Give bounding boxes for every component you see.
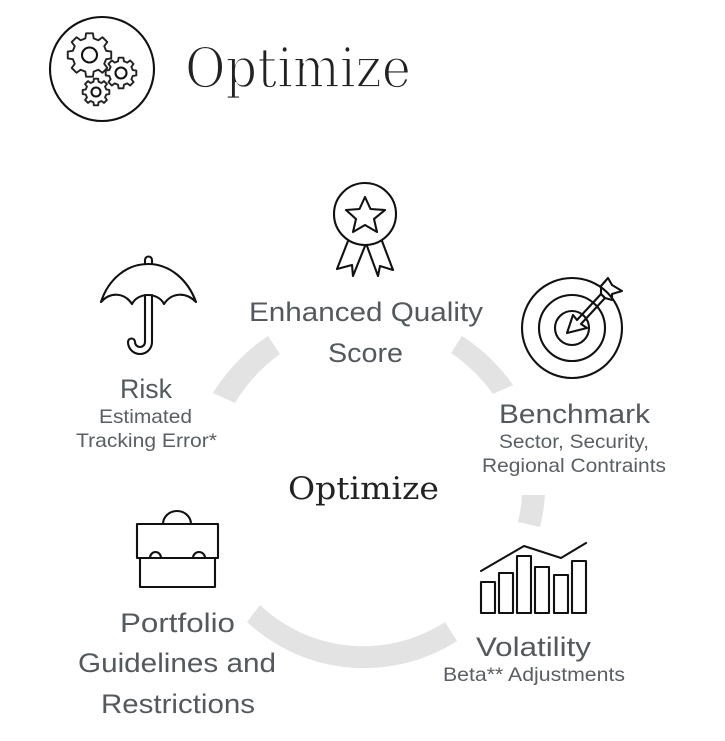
icon: target with arrow xyxy=(522,278,622,378)
icon: umbrella xyxy=(101,257,196,354)
label: Portfolio Guidelines and Restrictions: Guidelines and xyxy=(78,648,276,678)
icon: volatility bar chart xyxy=(481,543,586,613)
ring segment: right xyxy=(518,495,545,527)
header icon: gears in circle xyxy=(50,17,154,121)
center heading: Optimize xyxy=(288,471,439,507)
label: Volatility: Volatility xyxy=(476,632,592,662)
label: Volatility: Beta** Adjustments xyxy=(443,664,625,686)
icon: briefcase xyxy=(137,511,218,587)
title: Optimize xyxy=(185,36,411,100)
label: Enhanced Quality Score: Enhanced Quality xyxy=(249,297,484,327)
label: Benchmark: Regional Contraints xyxy=(482,455,666,477)
label: Benchmark: Benchmark xyxy=(499,399,651,429)
label: Benchmark: Sector, Security, xyxy=(499,431,649,453)
ring segment: top right xyxy=(451,336,513,394)
label: Risk xyxy=(76,374,217,452)
label: Portfolio Guidelines and Restrictions: Restrictions xyxy=(101,689,255,719)
icon: award ribbon xyxy=(334,183,396,276)
label: Risk: Estimated xyxy=(99,406,192,428)
cycle ring xyxy=(213,336,545,668)
label: Risk: Risk xyxy=(120,374,172,404)
label: Risk: Tracking Error* xyxy=(76,430,217,452)
label: Enhanced Quality Score xyxy=(249,297,484,368)
label: Portfolio Guidelines and Restrictions: Portfolio xyxy=(120,608,235,638)
label: Benchmark xyxy=(482,399,666,477)
label: Portfolio Guidelines and Restrictions xyxy=(78,608,276,719)
ring segment: top left xyxy=(213,336,280,403)
label: Enhanced Quality Score: Score xyxy=(328,338,403,368)
ring segment: bottom xyxy=(247,605,457,668)
label: Volatility xyxy=(443,632,625,686)
